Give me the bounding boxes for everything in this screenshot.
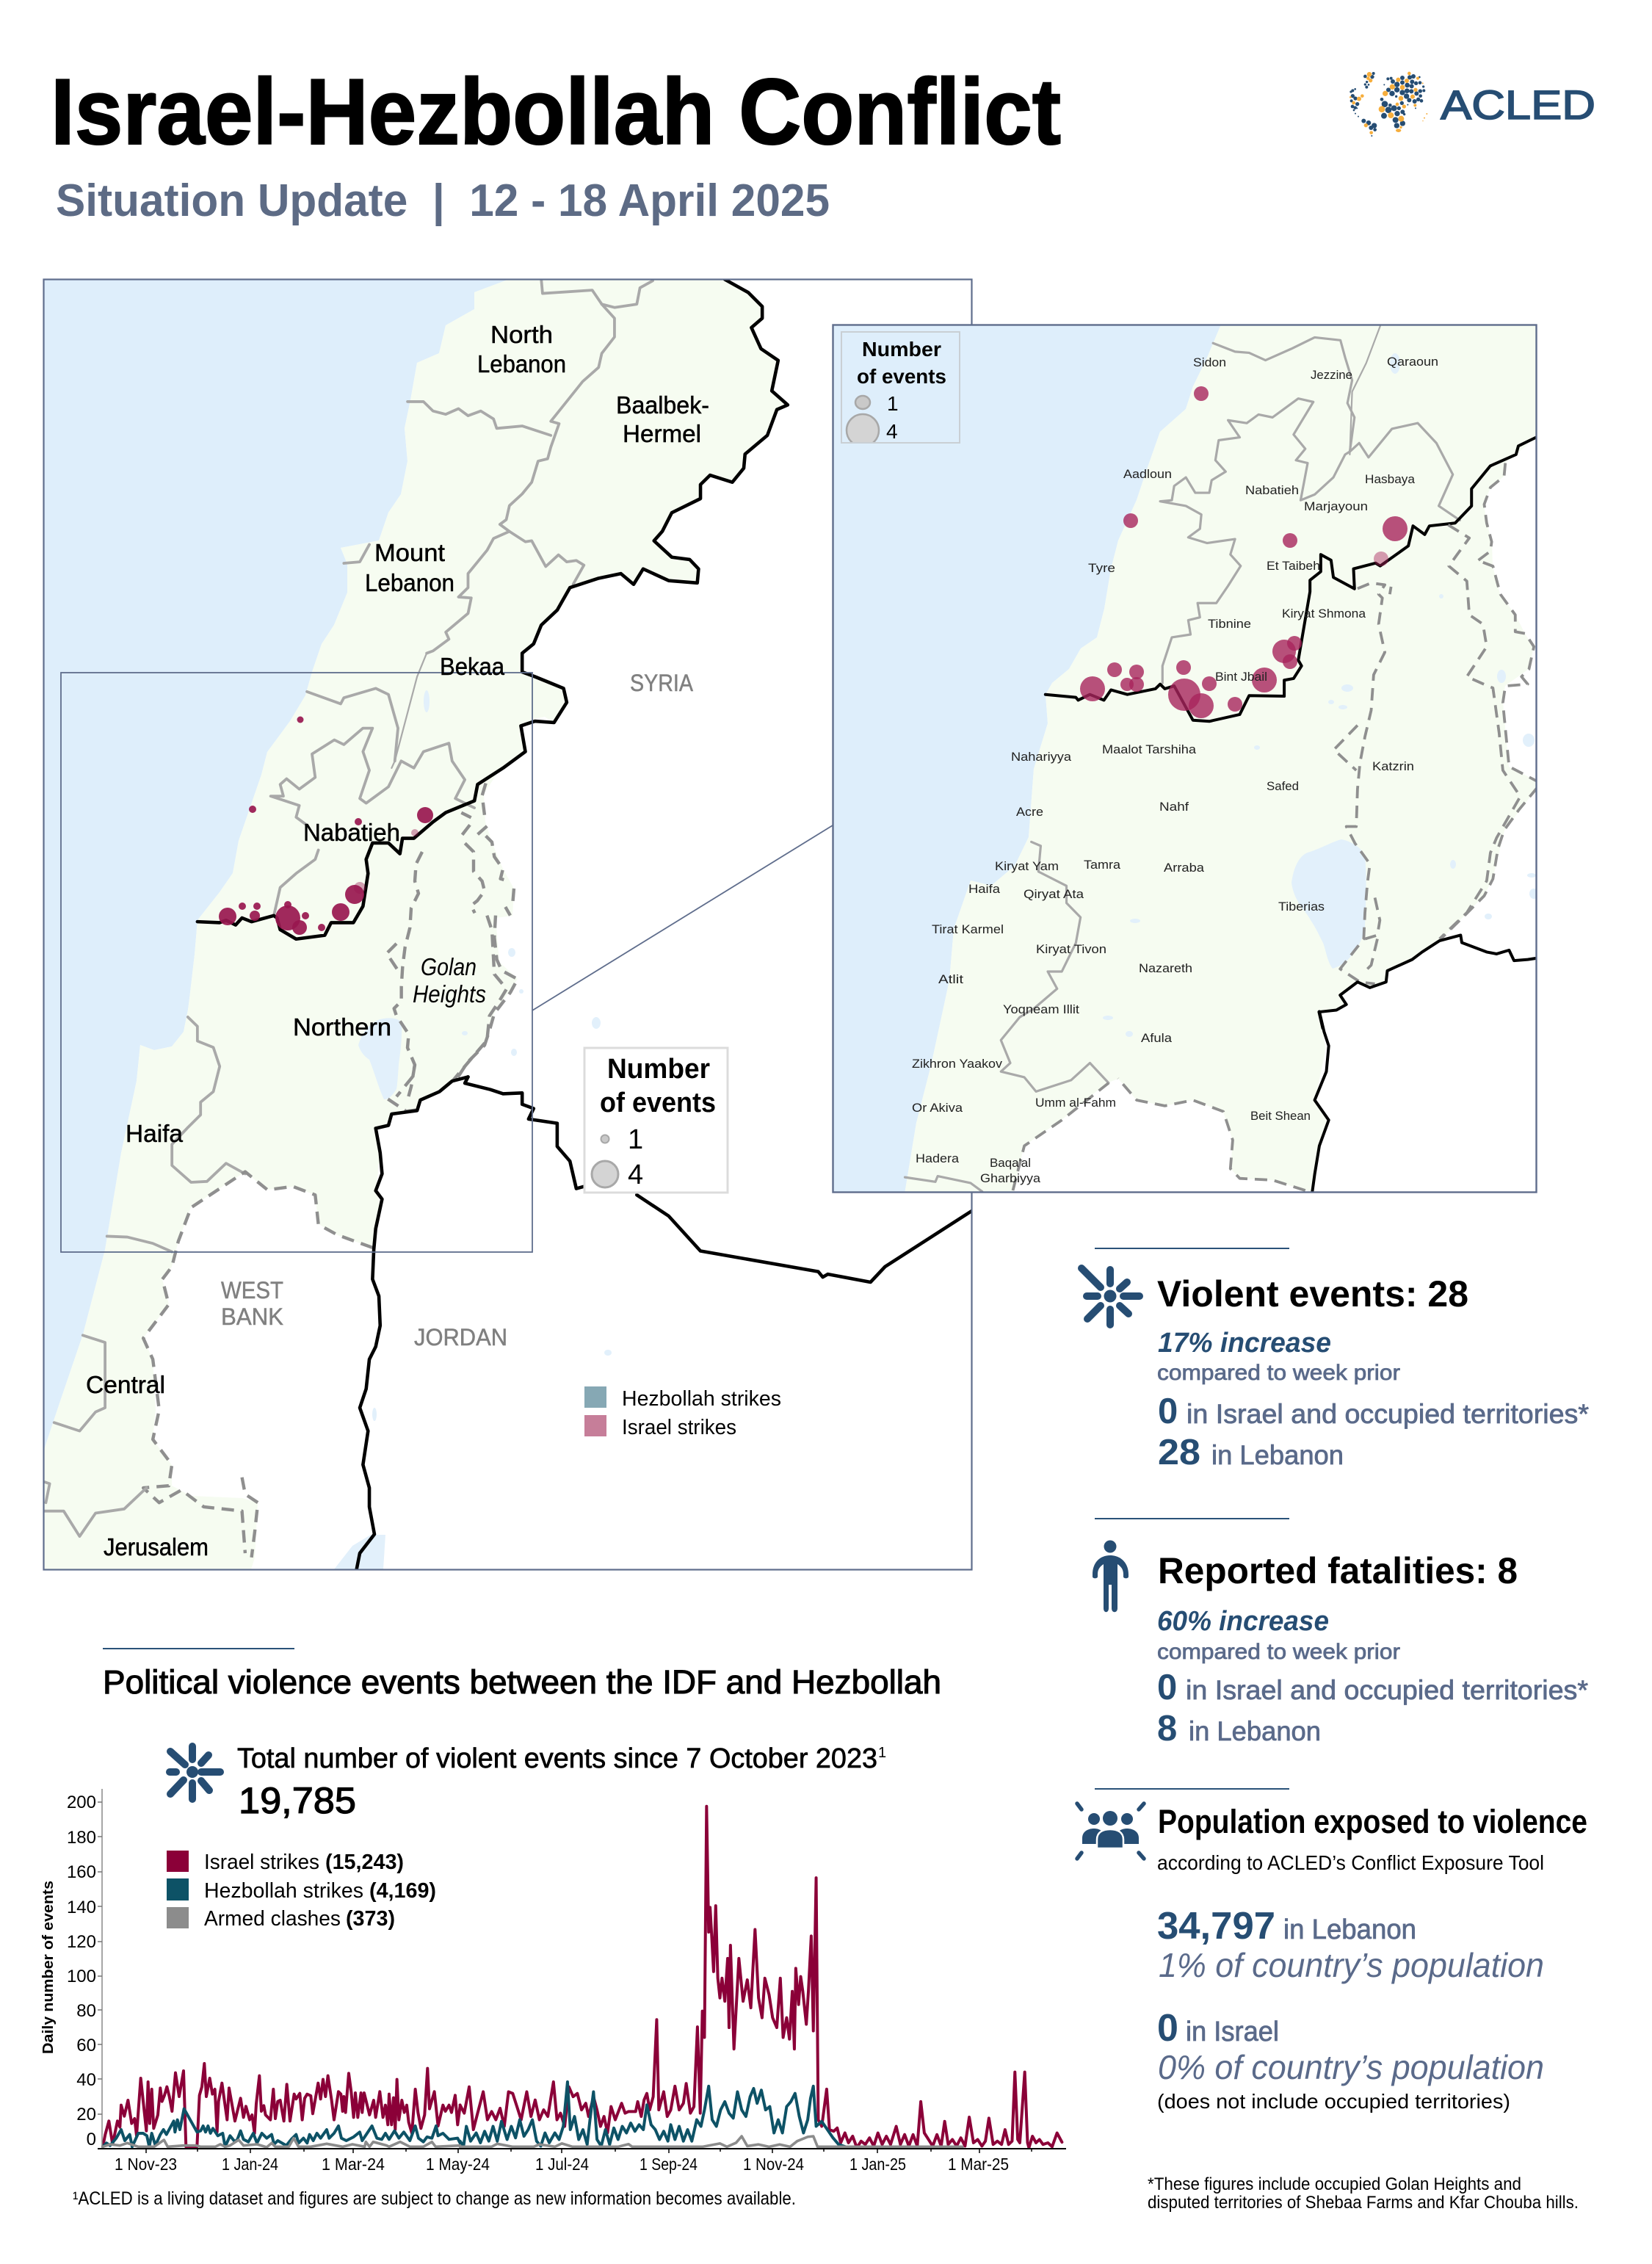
section heading: Political violence events between the IDF and Hezbollah xyxy=(103,1663,941,1701)
y axis labels: 160 xyxy=(67,1862,96,1882)
x axis labels: 1 Sep-24 xyxy=(640,2155,698,2174)
y axis labels: 0 xyxy=(87,2130,96,2149)
inset place labels: Nabatieh xyxy=(1245,483,1299,497)
main map labels: SYRIA xyxy=(630,670,694,696)
map frame xyxy=(44,279,972,1570)
main map labels: BANK xyxy=(221,1303,283,1330)
chart legend: Israel strikes xyxy=(204,1851,319,1874)
main map labels: Golan xyxy=(421,953,477,980)
panel: reported fatalities xyxy=(1093,1519,1588,1748)
y axis labels: 40 xyxy=(76,2070,96,2090)
source: according to ACLED’s Conflict Exposure Tool xyxy=(1157,1851,1544,1874)
x axis labels: 1 Mar-25 xyxy=(948,2155,1009,2174)
x axis labels: 1 May-24 xyxy=(426,2155,490,2174)
count: Lebanon: in Lebanon xyxy=(1189,1716,1321,1746)
inset place labels xyxy=(912,355,1438,1185)
comparison: compared to week prior xyxy=(1157,1640,1400,1664)
change: 60% increase xyxy=(1157,1606,1329,1637)
inset legend: number of events: Number xyxy=(862,338,941,361)
inset place labels: Hadera xyxy=(916,1151,960,1165)
connector line xyxy=(532,825,833,1010)
main map legend: number of events: Number xyxy=(607,1054,710,1085)
inset place labels: Haifa xyxy=(968,882,1001,896)
x axis labels: 1 Nov-23 xyxy=(115,2155,177,2174)
inset place labels: Safed xyxy=(1267,779,1299,793)
main map labels: North xyxy=(490,321,553,348)
inset admin and border lines (west) xyxy=(905,326,1536,1192)
inset place labels: Afula xyxy=(1141,1031,1173,1045)
inset place labels: Tamra xyxy=(1084,858,1121,872)
main map legend: number of events: 1 xyxy=(628,1124,643,1155)
chart legend: (15,243) xyxy=(325,1851,404,1874)
footnote: territories: disputed territories of Shebaa Farms and Kfar Chouba hills. xyxy=(1148,2193,1579,2213)
inset legend: number of events xyxy=(841,332,960,446)
count: Lebanon: in Lebanon xyxy=(1283,1914,1416,1945)
inset place labels: Atlit xyxy=(938,972,963,986)
main map labels: WEST xyxy=(221,1277,283,1303)
inset frame xyxy=(833,325,1536,1193)
rule xyxy=(1095,1788,1289,1790)
inset place labels: Hasbaya xyxy=(1365,472,1416,486)
share: Israel: 0% of country’s population xyxy=(1158,2048,1544,2086)
count: Israel xyxy=(1157,2007,1279,2050)
admin boundaries: north xyxy=(271,279,653,916)
inset place labels: Nahariyya xyxy=(1011,750,1072,764)
footnote: territories xyxy=(1148,2174,1579,2213)
count: Israel: in Israel xyxy=(1186,2017,1279,2047)
inset place labels: Kiryat Shmona xyxy=(1282,607,1366,621)
disputed boundaries: Golan Heights xyxy=(387,784,518,1111)
count: Lebanon xyxy=(1157,1709,1321,1748)
inset place labels: Nahf xyxy=(1159,800,1189,814)
y axis labels: 140 xyxy=(67,1898,96,1917)
share: Lebanon: 1% of country’s population xyxy=(1159,1946,1544,1984)
total events value: 19,785 xyxy=(239,1780,356,1821)
y axis labels: 180 xyxy=(67,1828,96,1848)
strike colour legend xyxy=(584,1386,781,1439)
main map labels: Baalbek- xyxy=(616,391,709,419)
x axis labels: 1 Mar-24 xyxy=(322,2155,385,2174)
inset place labels: Jezzine xyxy=(1311,368,1352,382)
chart axes xyxy=(98,1789,1066,2153)
y axis labels: 200 xyxy=(67,1793,96,1812)
total events label: Total number of violent events since 7 October 2023 xyxy=(237,1743,877,1774)
headline: Reported fatalities: 8 xyxy=(1158,1550,1518,1591)
count: Lebanon: 28 xyxy=(1158,1433,1200,1472)
y axis labels xyxy=(67,1793,96,2149)
inset place labels: Umm al-Fahm xyxy=(1035,1096,1116,1110)
main map labels: Hermel xyxy=(623,420,701,447)
total events label: 1 xyxy=(878,1745,886,1761)
land xyxy=(43,279,788,1569)
series: Israel strikes xyxy=(103,1807,1062,2148)
inset place labels: Tirat Karmel xyxy=(932,922,1004,936)
logo wordmark: ACLED xyxy=(1441,82,1595,128)
strike colour legend: Hezbollah strikes xyxy=(622,1387,781,1411)
x axis labels: 1 Jan-25 xyxy=(849,2155,906,2174)
chart legend: Armed clashes xyxy=(204,1907,341,1931)
inset bubbles: events xyxy=(1080,386,1408,718)
chart legend: Hezbollah strikes xyxy=(204,1879,363,1903)
inset place labels: Yoqneam Illit xyxy=(1003,1002,1079,1016)
count: Lebanon xyxy=(1157,1905,1416,1947)
inset legend: number of events: of events xyxy=(857,365,946,388)
main map labels: Nabatieh xyxy=(303,819,400,846)
logo: ACLED xyxy=(1350,72,1595,137)
count: Israel xyxy=(1158,1392,1589,1431)
admin boundaries: south xyxy=(43,1017,372,1558)
icon: people xyxy=(1077,1804,1144,1859)
chart legend: (4,169) xyxy=(369,1879,436,1903)
panel: violent events xyxy=(1082,1248,1589,1472)
y axis labels: 120 xyxy=(67,1932,96,1952)
main map legend: number of events: of events xyxy=(600,1088,716,1118)
y axis labels: 100 xyxy=(67,1967,96,1986)
main map labels: Bekaa xyxy=(440,653,505,680)
inset place labels: Katzrin xyxy=(1372,759,1414,773)
section rule xyxy=(103,1648,294,1649)
icon: violence burst xyxy=(1082,1268,1140,1325)
count: Lebanon xyxy=(1158,1433,1344,1472)
inset land xyxy=(905,325,1537,1194)
rule xyxy=(1095,1518,1289,1519)
inset disputed boundaries: Golan Heights xyxy=(1319,463,1540,1028)
headline: Violent events: 28 xyxy=(1157,1273,1468,1314)
main map labels: Lebanon xyxy=(477,350,566,377)
icon: person xyxy=(1093,1541,1128,1612)
panel: inset map xyxy=(833,325,1540,1194)
count: Israel: 0 xyxy=(1157,2007,1178,2050)
panel: main map xyxy=(43,279,972,1570)
headline: Population exposed to violence xyxy=(1158,1803,1587,1840)
x axis labels xyxy=(115,2155,1009,2174)
international borders: south xyxy=(357,1077,972,1569)
chart legend xyxy=(167,1851,436,1931)
inset place labels: Beit Shean xyxy=(1250,1109,1311,1123)
main map labels: Central xyxy=(86,1371,165,1398)
inset legend: number of events: 4 xyxy=(886,420,898,443)
count: Israel xyxy=(1157,1668,1588,1707)
count: Lebanon: 8 xyxy=(1157,1709,1177,1748)
y axis labels: 20 xyxy=(76,2105,96,2124)
inset place labels: Qaraoun xyxy=(1387,355,1438,369)
main map labels: Lebanon xyxy=(365,569,454,596)
bubbles: events xyxy=(219,717,433,935)
inset place labels: Tibnine xyxy=(1208,617,1251,631)
main map labels: Heights xyxy=(413,980,486,1008)
inset place labels: Tiberias xyxy=(1278,900,1325,914)
inset place labels: Nazareth xyxy=(1139,961,1192,975)
change: 17% increase xyxy=(1158,1328,1331,1359)
x axis labels: 1 Nov-24 xyxy=(743,2155,804,2174)
title: Israel-Hezbollah Conflict xyxy=(51,59,1061,164)
main map labels: Haifa xyxy=(126,1120,184,1147)
international borders: north xyxy=(198,279,788,939)
chart legend: (373) xyxy=(346,1907,395,1931)
sea xyxy=(43,279,510,1452)
main map legend: number of events xyxy=(584,1048,728,1193)
icon: violence burst xyxy=(170,1746,220,1799)
section: political violence chart xyxy=(40,1649,1066,2209)
subtitle: Situation Update | 12 - 18 April 2025 xyxy=(56,176,830,227)
inset extent rectangle xyxy=(61,673,532,1252)
x axis labels: 1 Jul-24 xyxy=(535,2155,589,2174)
lakes xyxy=(334,690,612,1569)
main map labels: Northern xyxy=(293,1013,391,1041)
x axis labels: 1 Jan-24 xyxy=(222,2155,278,2174)
inset place labels: Arraba xyxy=(1164,861,1205,875)
inset place labels: Marjayoun xyxy=(1304,499,1368,513)
y axis labels: 60 xyxy=(76,2036,96,2055)
inset place labels: Tyre xyxy=(1088,561,1115,575)
rule xyxy=(1095,1248,1289,1249)
inset place labels: Kiryat Tivon xyxy=(1036,942,1106,956)
inset place labels: Sidon xyxy=(1193,355,1226,369)
count: Israel: 0 xyxy=(1157,1668,1177,1707)
inset place labels: Acre xyxy=(1016,805,1043,819)
inset lakes xyxy=(1103,353,1538,1037)
count: Israel: 0 xyxy=(1158,1392,1178,1431)
main map labels: JORDAN xyxy=(414,1324,507,1350)
inset place labels: Bint Jbail xyxy=(1215,670,1267,684)
inset place labels: Maalot Tarshiha xyxy=(1102,742,1197,756)
inset place labels: Gharbiyya xyxy=(980,1171,1041,1185)
inset place labels: Aadloun xyxy=(1123,467,1172,481)
chart footnote: ¹ACLED is a living dataset and figures are subject to change as new information becomes available. xyxy=(73,2188,796,2209)
count: Israel: in Israel and occupied territories* xyxy=(1186,1675,1588,1705)
panel: population exposed xyxy=(1077,1789,1587,2113)
inset place labels: Et Taibeh xyxy=(1267,559,1320,573)
inset place labels: Baqa'al xyxy=(990,1156,1031,1170)
inset place labels: Qiryat Ata xyxy=(1024,887,1084,901)
icon: dotted globe xyxy=(1350,72,1427,137)
footnote: territories: *These figures include occupied Golan Heights and xyxy=(1148,2174,1521,2194)
strike colour legend: Israel strikes xyxy=(622,1416,736,1439)
series: Hezbollah strikes xyxy=(103,2082,963,2148)
count: Lebanon: in Lebanon xyxy=(1211,1440,1344,1470)
inset legend: number of events: 1 xyxy=(887,392,899,415)
y axis labels: 80 xyxy=(76,2001,96,2021)
main map labels: Jerusalem xyxy=(104,1533,209,1560)
series: Armed clashes xyxy=(103,2136,963,2147)
inset sea xyxy=(833,325,1221,1194)
inset place labels: Or Akiva xyxy=(912,1101,963,1115)
comparison: compared to week prior xyxy=(1157,1361,1400,1385)
line chart xyxy=(103,1807,1062,2148)
note: (does not include occupied territories) xyxy=(1157,2090,1510,2113)
inset place labels: Zikhron Yaakov xyxy=(912,1057,1003,1071)
count: Israel: in Israel and occupied territories* xyxy=(1187,1399,1589,1429)
main map legend: number of events: 4 xyxy=(628,1160,643,1190)
y axis title: Daily number of events xyxy=(40,1881,57,2054)
count: Lebanon: 34,797 xyxy=(1157,1905,1275,1947)
inset place labels: Kiryat Yam xyxy=(995,859,1059,873)
main map labels: Mount xyxy=(374,539,445,566)
main map labels xyxy=(86,321,709,1560)
